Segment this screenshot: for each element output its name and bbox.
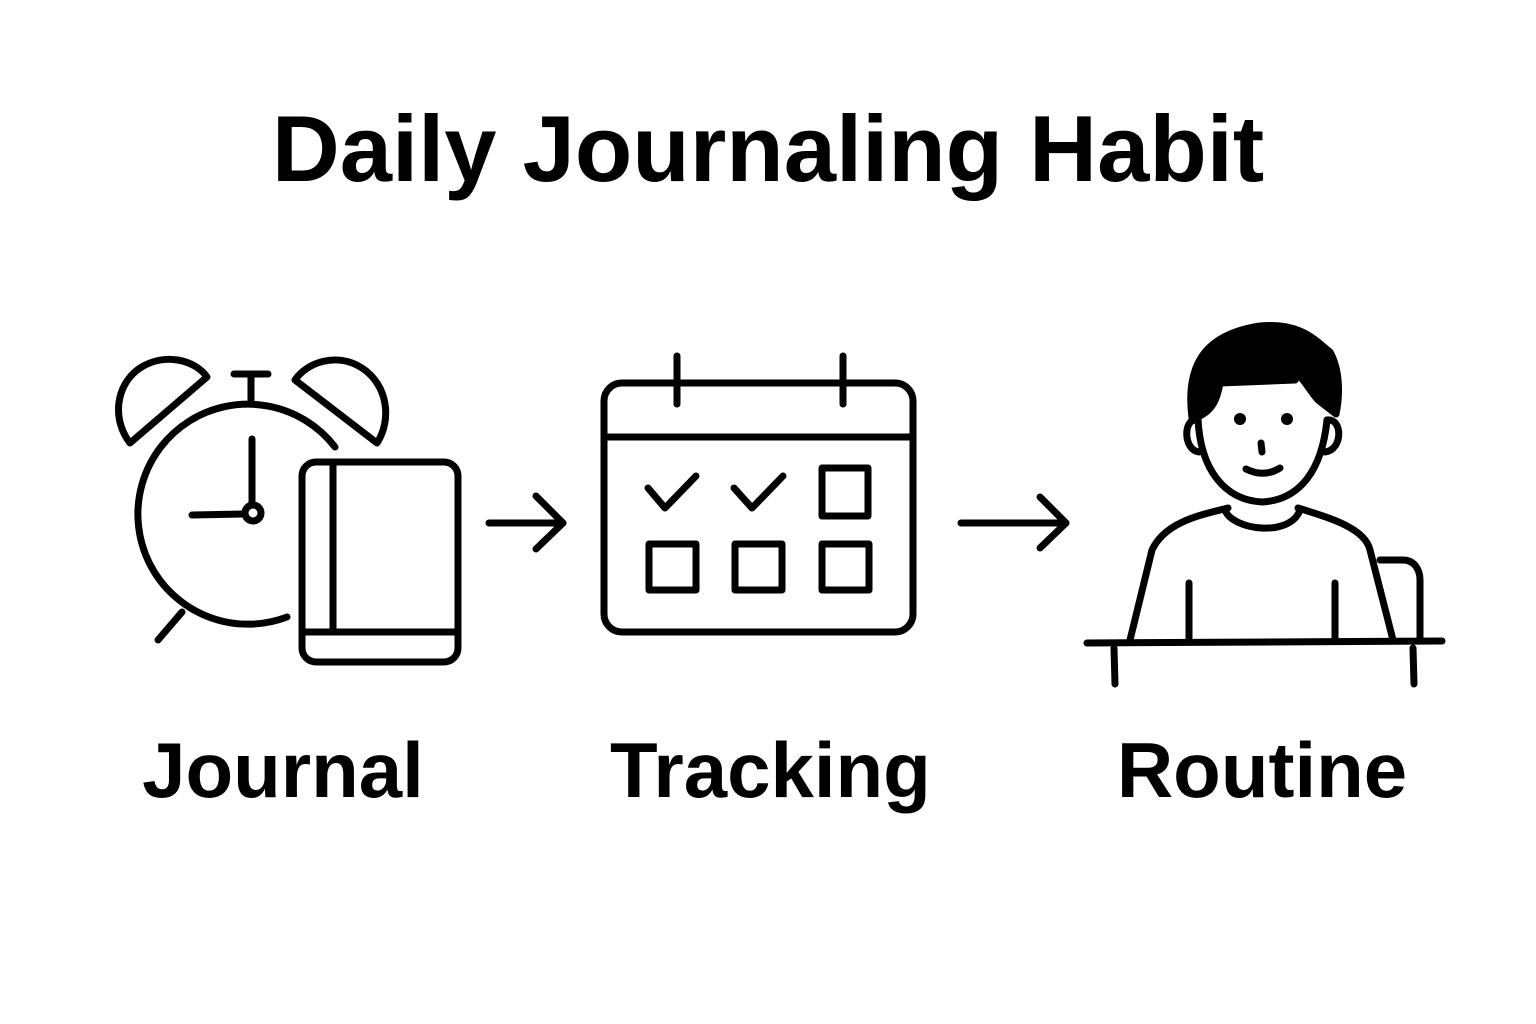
label: Routine: Routine [1117, 726, 1407, 814]
icon: person at desk [1087, 325, 1442, 684]
arrow 1 [489, 496, 563, 549]
icon: calendar [604, 356, 913, 632]
title: Daily Journaling Habit [272, 96, 1264, 201]
icon: alarm clock [119, 359, 386, 640]
icon: journal book [302, 462, 458, 662]
label: Tracking: Tracking [610, 726, 931, 814]
arrow 2 [961, 497, 1066, 548]
label: Journal: Journal [142, 726, 424, 814]
